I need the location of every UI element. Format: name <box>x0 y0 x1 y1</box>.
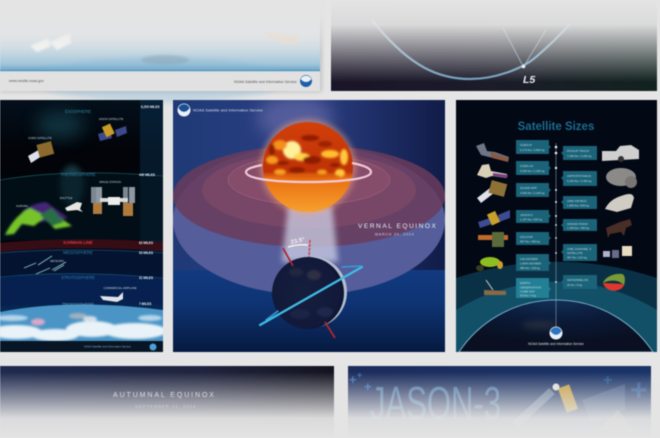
footer url: www.nesdis.noaa.gov <box>9 79 44 83</box>
layer labels: KARMAN LINE <box>63 240 93 245</box>
right data boxes <box>561 146 597 289</box>
layer labels: STRATOSPHERE <box>61 275 95 280</box>
right box text <box>567 149 592 287</box>
icon: aurora <box>5 202 72 235</box>
icon: airplane <box>100 292 123 302</box>
plus signs: + <box>357 370 362 380</box>
icon: space shuttle <box>65 202 83 212</box>
layer: thermosphere band <box>0 174 140 240</box>
item labels: COMMERCIAL AIRPLANE <box>103 286 137 290</box>
left box text: 1,157 lbs / 525 kg <box>520 218 543 222</box>
date: MARCH 20, 2024 <box>375 232 414 236</box>
item labels <box>16 117 137 290</box>
item labels: METEORS <box>50 259 64 263</box>
right box text: 20 lbs / 9 kg <box>567 283 583 287</box>
earth <box>459 300 653 352</box>
nebula glow <box>36 111 84 139</box>
gutter between lower panels <box>334 363 348 438</box>
panel: Jason-3 fragment <box>348 366 651 438</box>
left box text: DSCOVR <box>520 235 534 239</box>
layer: stratosphere <box>0 274 163 306</box>
layer: mesosphere <box>0 249 163 278</box>
icon: satellite silhouette right <box>263 32 301 45</box>
earth limb <box>310 256 348 327</box>
icon: NOAA logo <box>550 326 562 340</box>
panel: satellite sizes poster <box>456 100 657 352</box>
icon: satellite upper <box>98 123 127 141</box>
layer labels: THERMOSPHERE <box>60 172 96 177</box>
right box text: SATELLITE <box>567 251 583 255</box>
vertical reference axis <box>309 240 310 257</box>
panel: vernal equinox poster <box>173 96 445 352</box>
right box text: WATERMELON <box>567 278 588 282</box>
right box text: ONE CHANNEL 3 <box>567 247 591 251</box>
left box text: 4,600 lbs / 2,100 kg <box>520 191 545 195</box>
item labels: GOES SATELLITE <box>28 136 52 140</box>
milky way glow <box>257 96 333 140</box>
icon: NOAA logo <box>178 104 190 116</box>
plus signs: + <box>349 372 357 387</box>
title: VERNAL EQUINOX <box>358 223 437 230</box>
title: AUTUMNAL EQUINOX <box>113 392 216 399</box>
altitude values: 440 MILES <box>139 173 155 177</box>
orbit rings <box>173 145 445 295</box>
icon: space station <box>91 187 135 216</box>
panel: autumnal equinox fragment <box>0 366 334 438</box>
altitude values: 62 MILES <box>139 241 153 245</box>
inner halo <box>456 282 657 352</box>
layer labels: EXOSPHERE <box>65 109 91 114</box>
left box text: ICE-MOWER <box>520 257 539 261</box>
left satellite icons <box>476 143 510 295</box>
left box text: LAWN MOWER <box>520 262 542 266</box>
left box text: 480 lbs / 218 kg <box>520 266 540 270</box>
tilt arc <box>288 245 308 247</box>
right box text: PICKUP TRUCK <box>567 149 589 153</box>
left box text: OBSERVATION <box>520 286 541 290</box>
panel: top-right poster fragment <box>330 20 658 92</box>
panel: atmosphere layers poster: NOAA Satellite and Information Service <box>84 344 131 348</box>
right box text: 7,000 lbs / 3,200 kg <box>567 154 592 158</box>
altitude values: 7 MILES <box>139 302 151 306</box>
item labels: SHUTTLE <box>60 196 73 200</box>
left box text: 997 lbs / 450 kg <box>520 240 540 244</box>
equator ring <box>260 266 362 325</box>
footer service name: NOAA Satellite and Information Service <box>234 80 297 84</box>
left box text: 6,173 lbs / 2,800 kg <box>520 148 545 152</box>
item labels: SPACE STATION <box>99 180 121 184</box>
left box text: EARTH <box>520 281 530 285</box>
icon: satellite <box>515 384 578 425</box>
outer halo <box>456 262 657 352</box>
right object icons <box>602 145 639 291</box>
icon: satellite left <box>28 141 54 163</box>
footer strip <box>0 341 163 352</box>
right box text: 1960 VW BUG <box>567 199 587 203</box>
grid building <box>582 384 625 424</box>
layer: karman line <box>0 239 163 252</box>
plus signs: + <box>603 372 612 389</box>
icon: sun <box>263 122 353 212</box>
center timeline <box>555 143 557 333</box>
icon: NOAA logo <box>300 75 312 87</box>
tilt label: 23.5° <box>290 237 306 246</box>
altitude values: 53 MILES <box>139 251 153 255</box>
orbit arc <box>372 20 570 79</box>
item labels: AURORA <box>16 204 28 208</box>
layer: clouds and troposphere <box>0 304 163 342</box>
sun ring <box>246 163 371 182</box>
panel: top-left poster fragment <box>0 0 322 102</box>
panel: atmosphere layers poster <box>0 100 167 352</box>
beam between sun and earth <box>282 205 338 262</box>
altitude column <box>140 100 164 252</box>
title: JASON-3 <box>370 377 501 429</box>
label L5: L5 <box>523 74 535 86</box>
right box text: GRAND PIANO <box>567 222 589 226</box>
grid pyramid <box>598 410 635 432</box>
left box text: GOES-16 <box>520 164 533 168</box>
point marker <box>522 65 525 68</box>
right box text: 1,000 lbs / 450 kg <box>567 226 590 230</box>
icon: storm swirl <box>141 55 189 65</box>
right box text: HIPPOPOTAMUS <box>567 174 591 178</box>
left box text: 5,000 lbs / 2,300 kg <box>520 169 545 173</box>
title: Satellite Sizes <box>518 121 594 133</box>
sun glow <box>260 119 356 215</box>
lagrange lines <box>503 28 546 66</box>
icon: meteors <box>24 256 66 274</box>
layer labels <box>60 109 96 307</box>
plus signs <box>349 370 648 407</box>
item labels: JASON SATELLITE <box>99 117 123 121</box>
icon: satellite silhouette left <box>30 33 71 52</box>
axis lower <box>325 322 335 338</box>
left box text: SUOMI NPP <box>520 186 537 190</box>
altitude values <box>139 105 160 306</box>
left box text: GOES-R <box>520 143 533 147</box>
plus signs: + <box>364 379 372 394</box>
bottom fade <box>0 372 660 438</box>
footer service name: NOAA Satellite and Information Service <box>528 342 584 346</box>
top left fade <box>0 0 325 52</box>
top right fade <box>331 0 660 82</box>
icon: earth <box>272 257 344 329</box>
left box text: 8.8 lbs / 4 kg <box>520 294 536 298</box>
layer labels: TROPOSPHERE <box>62 302 94 307</box>
right box text: 467 lbs / 212 kg <box>567 256 587 260</box>
right box text: 1,800 lbs / 820 kg <box>567 204 590 208</box>
left data boxes <box>516 140 551 298</box>
altitude values: 6,200 MILES <box>141 105 160 109</box>
axis upper <box>283 248 293 266</box>
layer labels: MESOSPHERE <box>63 250 93 255</box>
service name: NOAA Satellite and Information Service <box>193 108 264 112</box>
right box text: 5,200 lbs / 2,400 kg <box>567 179 592 183</box>
altitude values: 31 MILES <box>139 276 153 280</box>
left box text <box>520 143 545 298</box>
plus signs: + <box>630 374 648 407</box>
left box text: JASON-3 <box>520 213 533 217</box>
left box text: CUBE SAT <box>520 290 535 294</box>
date: SEPTEMBER 22, 2024 <box>135 404 196 409</box>
